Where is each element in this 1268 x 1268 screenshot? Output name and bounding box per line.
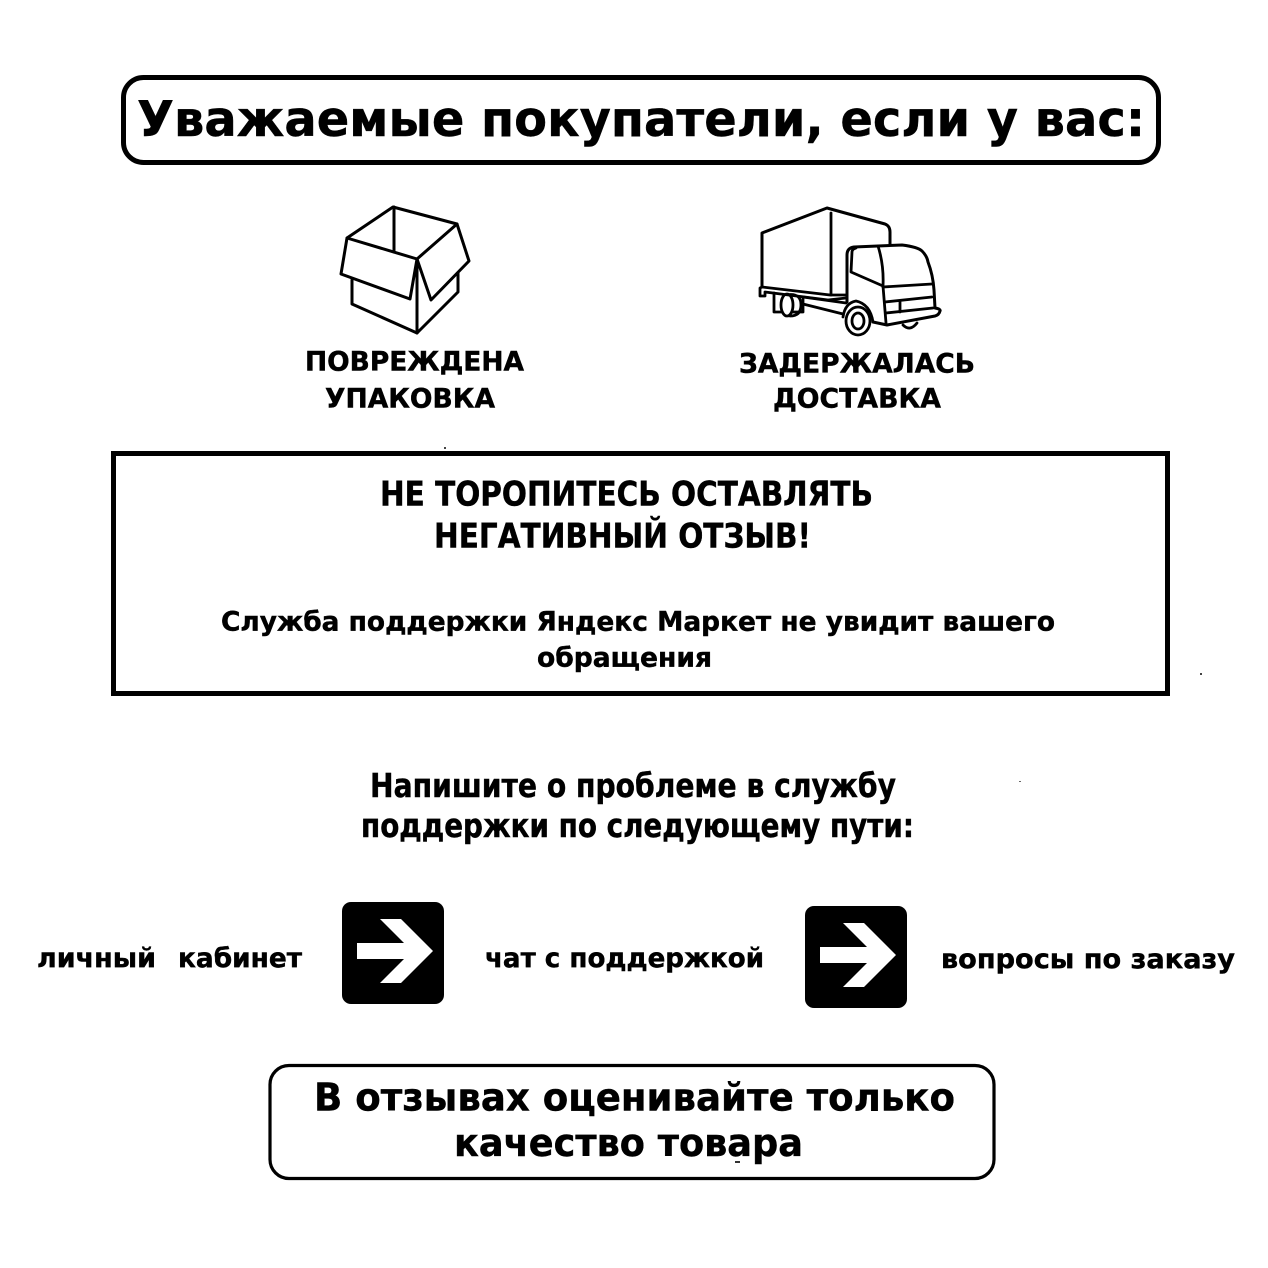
warning heading: НЕ ТОРОПИТЕСЬ ОСТАВЛЯТЬ	[380, 474, 873, 514]
icon: arrow one	[342, 902, 444, 1004]
icon: open damaged box	[341, 207, 469, 333]
icon: delivery truck	[760, 208, 940, 335]
warning heading: НЕГАТИВНЫЙ ОТЗЫВ!	[434, 516, 811, 556]
warning explanation: Служба поддержки Яндекс Маркет не увидит вашего	[221, 606, 1055, 638]
label: damaged packaging	[305, 346, 524, 414]
title banner: Уважаемые покупатели, если у вас:	[137, 91, 1145, 148]
title banner	[124, 78, 1158, 162]
warning explanation	[221, 606, 1055, 674]
step: personal account: кабинет	[178, 943, 302, 974]
step: personal account: личный	[37, 943, 156, 974]
bottom callout: В отзывах оценивайте только	[314, 1076, 955, 1120]
bottom callout	[270, 1066, 994, 1178]
label: delayed delivery: ЗАДЕРЖАЛАСЬ	[739, 348, 975, 380]
label: delayed delivery	[739, 348, 975, 414]
support instruction heading	[361, 766, 914, 845]
label: damaged packaging: ПОВРЕЖДЕНА	[305, 346, 524, 378]
support instruction heading: поддержки по следующему пути:	[361, 806, 914, 845]
bottom callout: качество товара	[454, 1121, 803, 1165]
icon: arrow two	[805, 906, 907, 1008]
label: delayed delivery: ДОСТАВКА	[773, 384, 941, 414]
step: support chat: чат с поддержкой	[485, 943, 764, 974]
warning heading	[380, 474, 873, 556]
support instruction heading: Напишите о проблеме в службу	[370, 766, 896, 805]
step: personal account	[37, 943, 302, 974]
warning explanation: обращения	[537, 642, 712, 674]
label: damaged packaging: УПАКОВКА	[325, 384, 495, 414]
step: order questions: вопросы по заказу	[941, 944, 1235, 975]
warning panel	[114, 454, 1168, 694]
